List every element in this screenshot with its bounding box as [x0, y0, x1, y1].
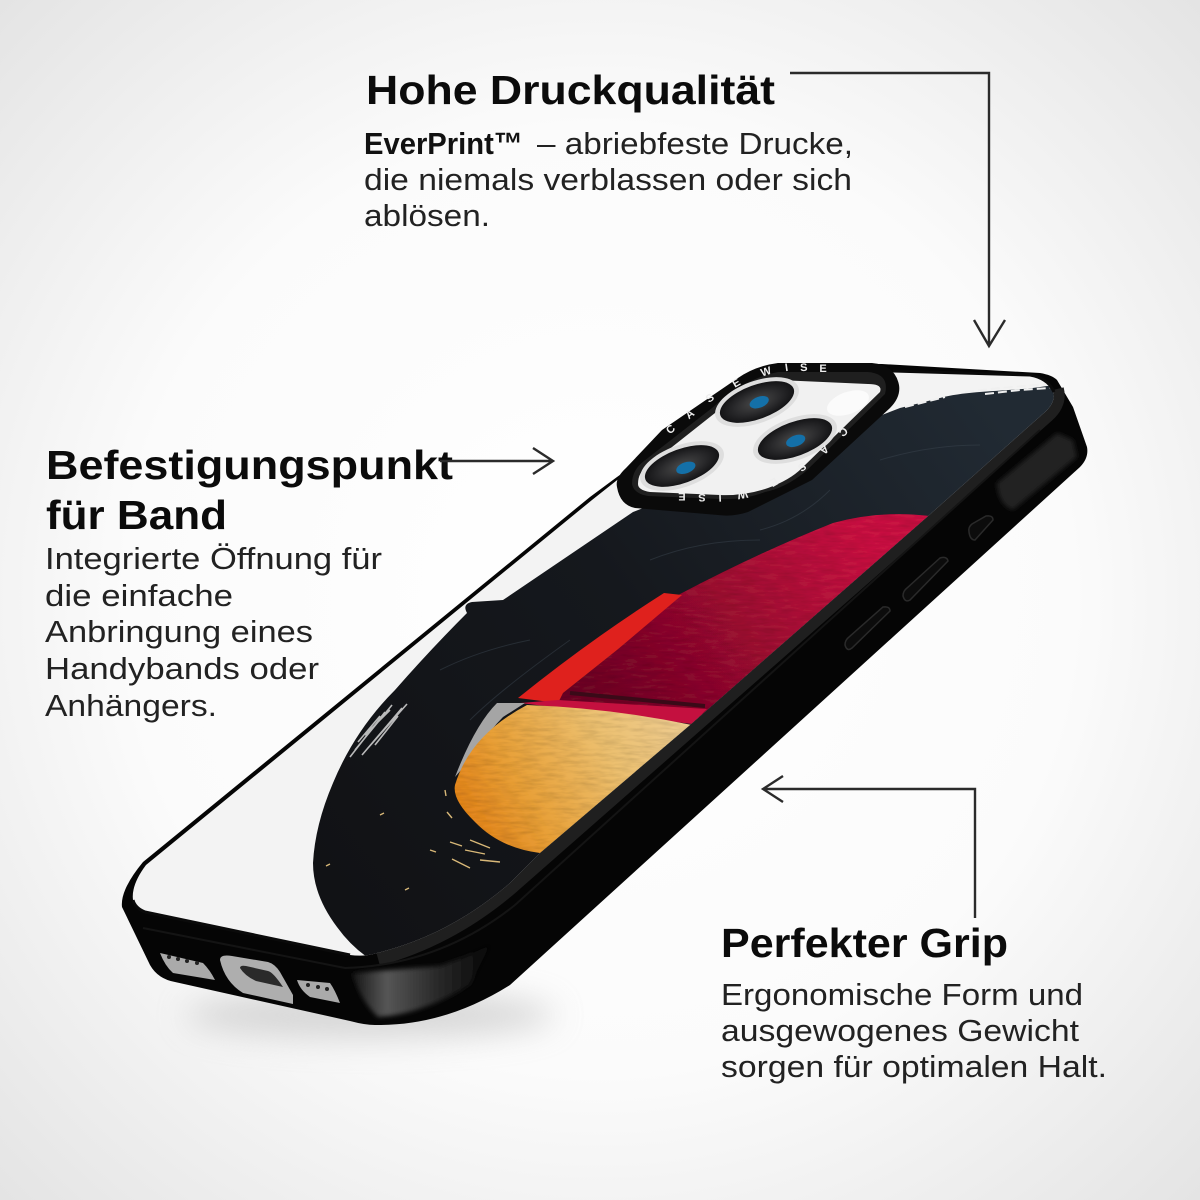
brand lettering: I	[784, 362, 789, 374]
bright red band	[518, 593, 682, 703]
heading: Befestigungspunkt	[46, 442, 453, 488]
brand lettering: C	[836, 424, 850, 438]
brand lettering: E	[767, 475, 780, 489]
text block	[364, 126, 853, 233]
brand lettering: S	[704, 392, 717, 406]
callout: strap attachment	[45, 442, 453, 723]
text block: EverPrint™	[364, 126, 523, 161]
lens top	[708, 367, 806, 437]
text block	[45, 541, 382, 723]
flash	[824, 385, 872, 421]
white top brush	[905, 384, 1050, 407]
brand lettering: S	[800, 362, 808, 374]
crimson area	[558, 514, 930, 730]
text block: sorgen für optimalen Halt.	[721, 1049, 1107, 1084]
lens left	[633, 431, 731, 501]
brand lettering: C	[664, 423, 678, 437]
text block: Anbringung eines	[45, 614, 313, 649]
text block: die niemals verblassen oder sich	[364, 162, 852, 197]
artwork face	[132, 372, 1054, 956]
speaker left	[160, 953, 215, 980]
phone shadow	[185, 991, 555, 1039]
text block	[721, 977, 1107, 1084]
silver strip	[455, 703, 525, 777]
heading	[46, 442, 453, 538]
action button	[969, 516, 993, 540]
text block: Integrierte Öffnung für	[45, 541, 382, 576]
side buttons	[845, 516, 993, 649]
text block: Anhängers.	[45, 688, 217, 723]
callout: print quality	[364, 67, 853, 233]
arrow: grip	[763, 776, 975, 918]
text block: – abriebfeste Drucke,	[537, 126, 853, 161]
lens right	[746, 404, 844, 474]
text block: die einfache	[45, 578, 233, 613]
brand lettering: A	[683, 407, 697, 422]
brand lettering: E	[730, 376, 743, 390]
brand lettering: E	[678, 490, 686, 502]
brand lettering: W	[759, 365, 773, 379]
case body silhouette	[122, 363, 1087, 1025]
brand lettering: S	[698, 491, 706, 503]
arrow: strap attachment	[440, 448, 553, 474]
text block: Handybands oder	[45, 651, 319, 686]
magenta strip	[520, 700, 707, 724]
black paint	[313, 386, 1054, 956]
brand lettering: A	[817, 442, 831, 456]
side gloss panel	[997, 433, 1077, 510]
text block: Ergonomische Form und	[721, 977, 1083, 1012]
volume down	[845, 607, 890, 649]
camera island	[617, 362, 899, 516]
brand lettering	[664, 362, 850, 503]
brand lettering: E	[819, 363, 827, 375]
white brush scratch	[350, 704, 407, 757]
paint scratches	[440, 445, 980, 720]
heading: Hohe Druckqualität	[366, 67, 775, 113]
island bevel	[632, 372, 886, 499]
speaker holes	[167, 955, 329, 991]
yellow form	[455, 705, 692, 853]
dark strip	[570, 693, 705, 706]
island frame	[617, 363, 899, 516]
charging port	[220, 956, 293, 1004]
corner gloss	[352, 945, 490, 1017]
volume up	[903, 557, 948, 601]
front rim highlight	[377, 390, 1054, 955]
speaker right	[297, 980, 340, 1003]
callout: grip	[721, 920, 1107, 1084]
gold speckles	[326, 790, 500, 890]
island window	[638, 380, 880, 495]
text block: ausgewogenes Gewicht	[721, 1013, 1079, 1048]
phone case	[100, 350, 1100, 1025]
arrow: print quality	[790, 73, 1005, 346]
brand lettering: W	[736, 487, 749, 501]
brand lettering: I	[718, 491, 722, 503]
brand lettering: S	[795, 459, 808, 473]
heading: Perfekter Grip	[721, 920, 1008, 966]
front rim line	[133, 371, 1054, 955]
rim groove	[143, 430, 1040, 968]
white base	[132, 372, 1054, 956]
heading: für Band	[46, 492, 227, 538]
text block: ablösen.	[364, 198, 490, 233]
